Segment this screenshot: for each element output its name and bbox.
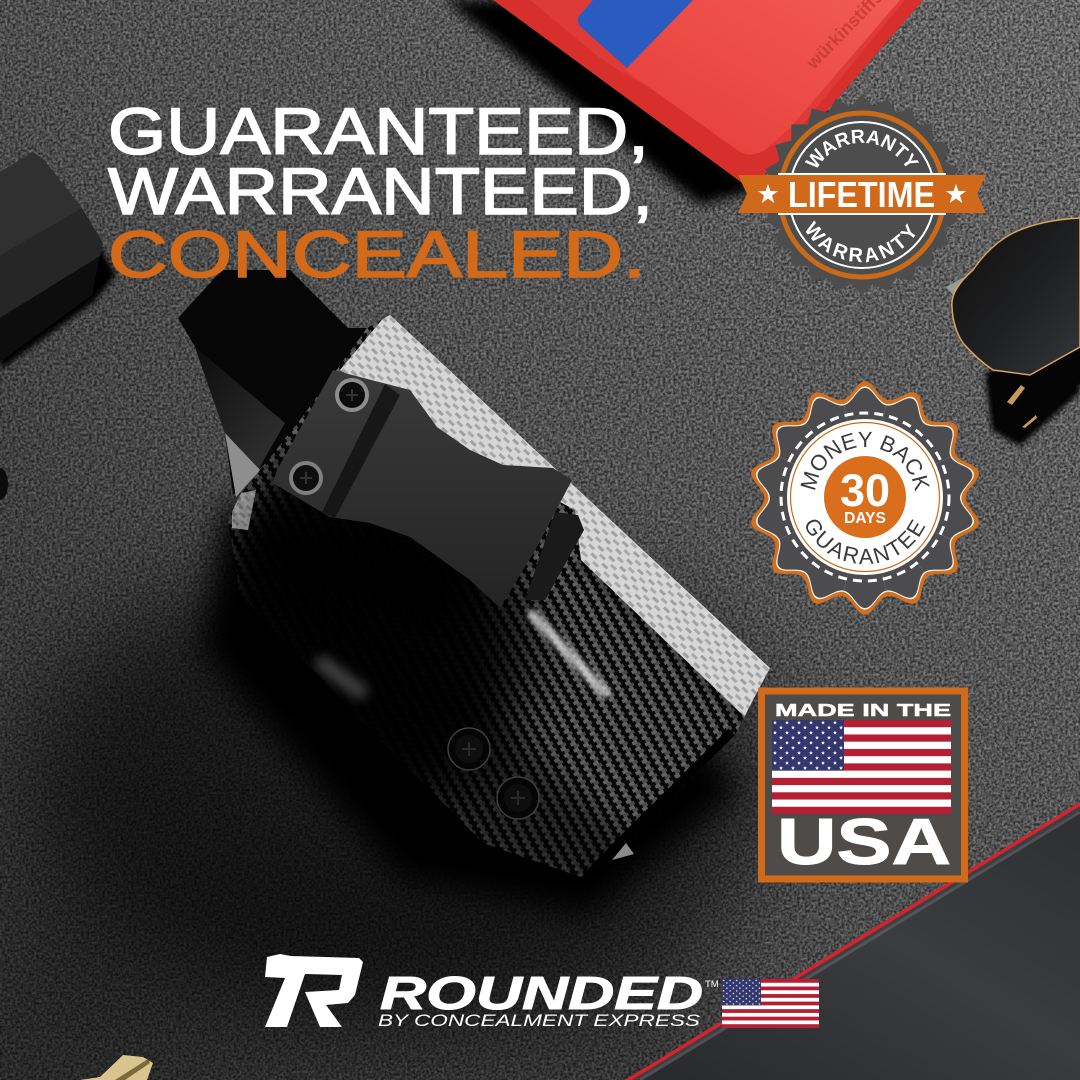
title line 3: CONCEALED.	[108, 217, 646, 291]
upper clip screw	[335, 378, 369, 412]
belt clip	[273, 370, 572, 608]
rear strap	[525, 512, 584, 600]
keys at bottom left	[80, 1055, 153, 1080]
title line 2: WARRANTEED,	[108, 154, 653, 228]
warranty arc top: WARRANTY	[804, 130, 920, 168]
title line 1: GUARANTEED,	[108, 94, 649, 168]
badge: 30 days money back guarantee	[751, 381, 979, 615]
title: guaranteed, warranteed, concealed	[108, 94, 653, 291]
us flag	[772, 720, 951, 814]
magazine pouch on the left	[0, 152, 116, 370]
warranty arc bottom: WARRANTY	[806, 220, 916, 262]
red wallet with blue card	[445, 0, 923, 205]
trademark: TM	[705, 979, 719, 990]
lower shell screw right	[497, 777, 539, 819]
days: DAYS	[844, 510, 886, 527]
ribbon	[738, 175, 986, 213]
carbon shell	[228, 315, 770, 877]
badge: lifetime warranty	[738, 95, 986, 294]
badge: made in the USA	[762, 691, 964, 879]
sunglasses on the right	[946, 218, 1080, 446]
firearm slide	[178, 270, 367, 495]
R pistol mark	[265, 954, 363, 1027]
star left	[758, 184, 778, 203]
lower shell screw left	[448, 728, 490, 770]
small us flag	[722, 979, 819, 1028]
lifetime label: LIFETIME	[788, 174, 935, 215]
usa label: USA	[777, 805, 951, 878]
tagline: BY CONCEALMENT EXPRESS	[378, 1011, 701, 1030]
holster cast shadow	[200, 500, 740, 915]
phone at bottom right	[625, 802, 1080, 1080]
holster: carbon fibre with black firearm and belt clip	[178, 270, 800, 915]
middle clip screw	[289, 461, 323, 495]
money back arc: MONEY BACK	[800, 432, 930, 492]
star right	[946, 184, 966, 203]
guarantee arc: GUARANTEE	[806, 519, 926, 564]
logo: Rounded by Concealment Express	[265, 954, 819, 1030]
30: 30	[840, 465, 890, 516]
made in the label: MADE IN THE	[775, 700, 951, 720]
small dark object at left edge	[0, 468, 8, 500]
rounded wordmark: ROUNDED	[380, 967, 703, 1019]
